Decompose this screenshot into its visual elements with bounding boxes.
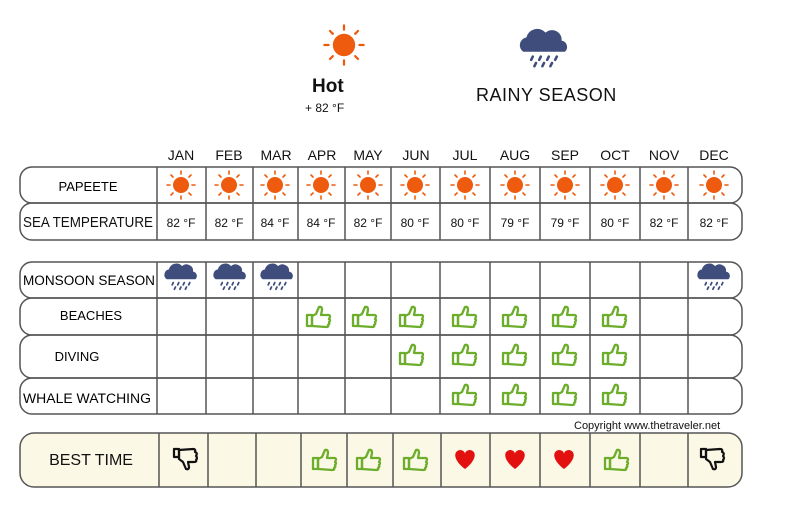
row: monsoon [23, 264, 730, 289]
month labels: NOV [649, 147, 680, 163]
row: diving: DIVING [55, 349, 99, 364]
month labels: JAN [168, 147, 194, 163]
month labels: MAR [260, 147, 292, 163]
month labels: MAY [353, 147, 383, 163]
month labels: OCT [600, 147, 630, 163]
table: weather [20, 167, 742, 240]
row: best time: BEST TIME [49, 452, 133, 469]
month labels [168, 147, 729, 163]
row: sea temperature: 84 °F [307, 216, 335, 230]
row: papeete: PAPEETE [58, 179, 118, 194]
row: sea temperature: 84 °F [261, 216, 289, 230]
month labels: FEB [215, 147, 243, 163]
row: sea temperature: 79 °F [501, 216, 529, 230]
header: rainy legend [476, 29, 617, 105]
row: sea temperature: 82 °F [215, 216, 243, 230]
month labels: AUG [500, 147, 530, 163]
row: sea temperature: SEA TEMPERATURE [23, 215, 153, 231]
row: diving [55, 345, 626, 365]
row: sea temperature: 80 °F [601, 216, 629, 230]
header: hot legend: + 82 °F [305, 101, 344, 115]
row: sea temperature: 82 °F [650, 216, 678, 230]
month labels: DEC [699, 147, 729, 163]
header: hot legend: Hot [312, 76, 344, 97]
row: monsoon: MONSOON SEASON [23, 273, 155, 288]
row: sea temperature: 79 °F [551, 216, 579, 230]
table: activities [20, 262, 742, 414]
row: whale watching [23, 385, 626, 406]
row: whale watching: WHALE WATCHING [23, 391, 151, 406]
month labels: JUN [402, 147, 430, 163]
row: sea temperature: 82 °F [167, 216, 195, 230]
row: beaches [60, 307, 626, 327]
copyright: Copyright www.thetraveler.net [574, 420, 720, 432]
row: sea temperature: 82 °F [354, 216, 382, 230]
month labels: SEP [551, 147, 579, 163]
row: sea temperature: 82 °F [700, 216, 728, 230]
month labels: APR [308, 147, 336, 163]
month labels: JUL [453, 147, 478, 163]
row: sea temperature [23, 215, 728, 231]
row: sea temperature: 80 °F [451, 216, 479, 230]
header: hot legend [305, 25, 364, 115]
header: rainy legend: RAINY SEASON [476, 85, 617, 105]
row: papeete [58, 171, 728, 199]
row: best time [20, 433, 742, 487]
row: beaches: BEACHES [60, 308, 122, 323]
row: sea temperature: 80 °F [401, 216, 429, 230]
